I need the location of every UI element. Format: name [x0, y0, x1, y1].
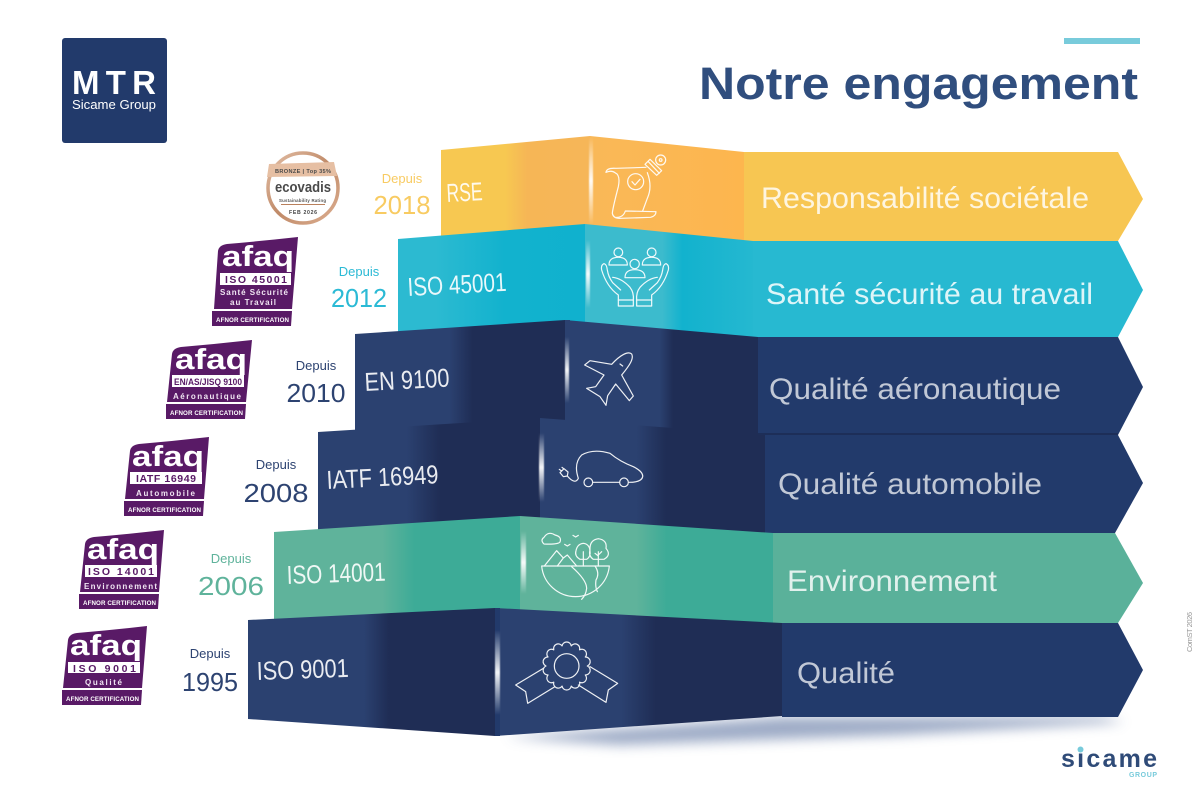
since 2008: Depuis	[256, 457, 297, 472]
icon: quality medal	[516, 642, 618, 703]
title: Notre engagement	[699, 58, 1138, 109]
badge: afaq ISO 45001: au Travail	[230, 298, 276, 307]
badge: afaq ISO 14001: afaq	[87, 534, 159, 566]
step: IATF 16949: IATF 16949	[326, 459, 439, 495]
since 1995: 1995	[182, 667, 238, 697]
step: EN 9100	[355, 320, 1143, 436]
logo: MTR Sicame Group	[62, 38, 167, 143]
badge: afaq ISO 14001: AFNOR CERTIFICATION	[83, 600, 157, 607]
badge: afaq ISO 9001	[62, 626, 147, 705]
step: EN 9100: EN 9100	[364, 363, 450, 397]
step: ISO 45001	[398, 224, 1143, 338]
since 2008: 2008	[244, 478, 308, 508]
icon: scroll with stamp	[606, 155, 666, 218]
credit: ComST 2026: ComST 2026	[1185, 612, 1194, 652]
label: Responsabilité sociétale: Responsabilité sociétale	[761, 182, 1089, 215]
logo: MTR Sicame Group: MTR	[72, 64, 156, 101]
badge: afaq ISO 45001: Santé Sécurité	[220, 288, 289, 297]
label: Environnement: Environnement	[787, 565, 998, 598]
step: ISO 14001	[274, 516, 1143, 625]
since 2018: 2018	[374, 190, 430, 220]
icon: electric car	[559, 451, 643, 487]
badge: EcoVadis bronze	[267, 153, 338, 223]
badge: afaq ISO 14001	[79, 530, 164, 609]
logo: Sicame Group: sicame	[1061, 745, 1157, 773]
badge: afaq ISO 9001: Qualité	[85, 678, 123, 687]
badge: EcoVadis bronze: BRONZE | Top 35%	[275, 169, 331, 175]
since 2010: 2010	[286, 378, 346, 408]
badge: afaq IATF 16949: afaq	[132, 441, 204, 473]
since 2012	[331, 264, 387, 313]
label: Santé sécurité au travail: Santé sécurité au travail	[766, 278, 1093, 311]
badge: afaq ISO 14001: Environnement	[84, 582, 157, 591]
badge: afaq EN/AS/JISQ 9100: afaq	[175, 344, 247, 376]
since 2018: Depuis	[382, 171, 423, 186]
step: IATF 16949	[318, 418, 1143, 534]
logo: MTR Sicame Group: Sicame Group	[72, 98, 156, 112]
label: Qualité automobile: Qualité automobile	[778, 468, 1042, 501]
icon: earth landscape	[542, 533, 609, 599]
since 2006	[198, 551, 264, 601]
since 2018	[374, 171, 430, 220]
shadow under the base step	[505, 717, 1125, 745]
badge: afaq EN/AS/JISQ 9100	[166, 340, 252, 419]
since 1995: Depuis	[190, 646, 231, 661]
badge: afaq IATF 16949	[124, 437, 209, 516]
badge: afaq IATF 16949: IATF 16949	[136, 473, 196, 485]
badge: afaq ISO 45001	[212, 237, 298, 326]
label: Qualité: Qualité	[797, 657, 895, 690]
since 2010: Depuis	[296, 358, 337, 373]
since 2010	[286, 358, 346, 408]
since 1995	[182, 646, 238, 697]
badge: EcoVadis bronze: Sustainability Rating	[279, 198, 326, 203]
badge: afaq EN/AS/JISQ 9100: EN/AS/JISQ 9100	[174, 377, 242, 387]
badge: afaq IATF 16949: Automobile	[136, 489, 196, 498]
accent bar	[1064, 38, 1140, 44]
badge: EcoVadis bronze: FEB 2026	[289, 210, 317, 216]
icon: hands holding people	[601, 248, 669, 306]
step: RSE	[441, 136, 1143, 242]
since 2006: 2006	[198, 571, 264, 601]
badge: afaq ISO 14001: ISO 14001	[88, 566, 154, 578]
badge: afaq ISO 9001: afaq	[70, 630, 142, 662]
step: ISO 9001	[248, 608, 1143, 736]
step: RSE: RSE	[446, 176, 483, 208]
badge: afaq ISO 45001: ISO 45001	[225, 274, 287, 286]
step: ISO 45001: ISO 45001	[407, 267, 507, 302]
badge: afaq ISO 9001: AFNOR CERTIFICATION	[66, 696, 140, 703]
logo: Sicame Group: GROUP	[1129, 772, 1157, 779]
badge: EcoVadis bronze: ecovadis	[275, 180, 331, 196]
badge: afaq EN/AS/JISQ 9100: Aéronautique	[173, 392, 242, 401]
since 2008	[244, 457, 308, 508]
badge: afaq ISO 45001: afaq	[222, 241, 294, 273]
badge: afaq ISO 45001: AFNOR CERTIFICATION	[216, 317, 290, 324]
since 2012: 2012	[331, 283, 387, 313]
badge: afaq IATF 16949: AFNOR CERTIFICATION	[128, 507, 202, 514]
label: Qualité aéronautique: Qualité aéronautique	[769, 373, 1061, 406]
step: ISO 9001: ISO 9001	[256, 653, 349, 686]
since 2012: Depuis	[339, 264, 380, 279]
icon: airplane	[585, 353, 633, 405]
badge: afaq ISO 9001: ISO 9001	[73, 663, 136, 675]
step: ISO 14001: ISO 14001	[286, 557, 386, 590]
since 2006: Depuis	[211, 551, 252, 566]
badge: afaq EN/AS/JISQ 9100: AFNOR CERTIFICATION	[170, 410, 244, 417]
